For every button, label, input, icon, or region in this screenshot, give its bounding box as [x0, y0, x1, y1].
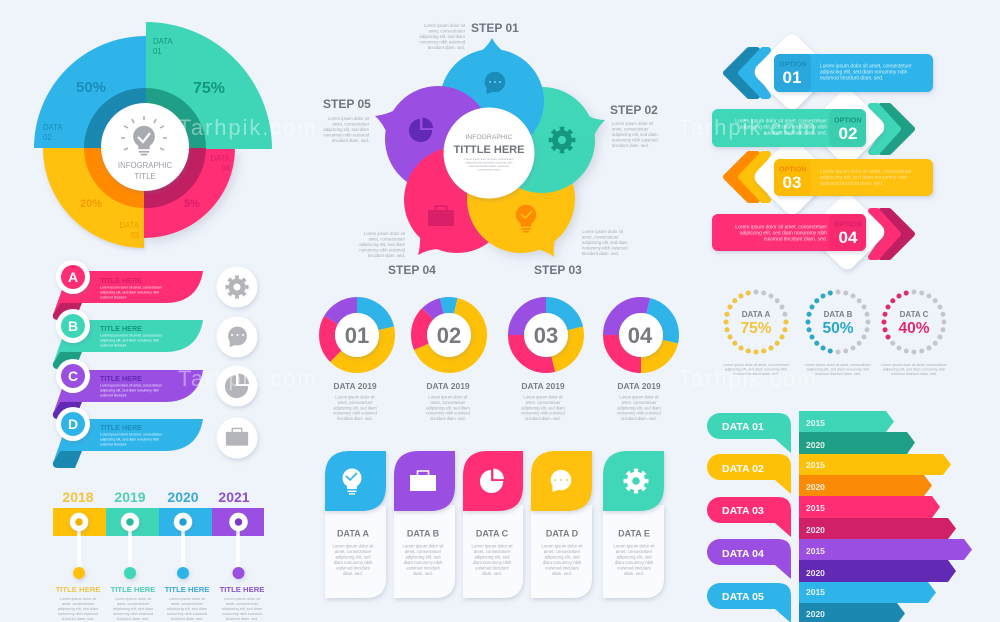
step 04 text: tincidunt diam. sed. — [368, 253, 405, 258]
ribbon B: Lorem ipsum dolor sit amet, consectetuer — [100, 334, 162, 338]
card C: diam. sed. — [482, 571, 502, 576]
bar year labels: 2015 — [806, 503, 825, 513]
value 50%: 50% — [76, 79, 106, 96]
step 01 text: nonummy nibh euismod — [419, 40, 466, 44]
step 03 text: amet, consectetuer — [582, 234, 619, 240]
card E: DATA E — [618, 528, 650, 538]
icon circle: briefcase — [216, 418, 258, 458]
timeline bar — [53, 508, 264, 536]
donut texts: tincidunt diam. sed. — [430, 416, 466, 421]
bubble: step 02 teal — [489, 87, 605, 193]
ribbon A — [53, 271, 203, 320]
center text: adipiscing elit, sed diam nonummy nibh — [466, 160, 513, 164]
step 04 text: nonummy nibh euismod — [359, 248, 406, 252]
ribbon C: euismod tincidunt — [100, 394, 126, 398]
ribbon D: euismod tincidunt — [100, 442, 126, 446]
card E: diam nonummy nibh — [615, 560, 654, 565]
icon: chat — [485, 72, 505, 94]
card E — [603, 451, 664, 598]
value 20%: 20% — [80, 198, 102, 210]
ring data C caption: adipiscing elit, sed diam nonummy nibh — [883, 368, 945, 372]
milestone texts: Lorem ipsum dolor sit — [115, 597, 151, 601]
donut texts: nonummy nibh euismod — [426, 411, 470, 416]
donut texts: tincidunt diam. sed. — [621, 416, 657, 421]
ribbon D: TITLE HERE — [100, 423, 142, 432]
icon: gear — [551, 129, 573, 151]
step 02 text: tincidunt diam. sed. — [612, 143, 649, 148]
bar year labels: 2020 — [806, 482, 825, 492]
ribbon C — [53, 370, 203, 419]
label bubble data 02 — [707, 454, 791, 494]
icon circle: pie — [216, 366, 258, 406]
milestone texts: adipiscing elit, sed diam — [167, 607, 207, 611]
card A: diam nonummy nibh — [334, 560, 373, 565]
milestone texts: amet, consectetuer — [171, 602, 204, 606]
step 05 label: STEP 05 — [323, 97, 371, 111]
step 04 text: adipiscing elit, sed diam — [359, 242, 405, 247]
badge C: C — [68, 368, 78, 384]
donut captions: DATA 2019 — [426, 381, 470, 391]
card B: amet, consectetuer — [405, 549, 442, 554]
option 4 bar: euismod tincidunt diam. sed. — [764, 236, 827, 242]
donut 04 — [611, 305, 671, 365]
card E: euismod tincidunt — [617, 566, 652, 570]
ribbon C: Lorem ipsum dolor sit amet, consectetuer — [100, 384, 162, 388]
donut texts: adipiscing elit, sed diam — [426, 405, 470, 410]
data bars panel — [707, 411, 972, 622]
donut numbers: 02 — [437, 323, 461, 348]
card B: Lorem ipsum dolor sit — [402, 544, 444, 548]
step 03 text: Lorem ipsum dolor sit — [582, 229, 624, 234]
data cards panel — [325, 451, 664, 598]
bar year labels: 2020 — [806, 609, 825, 619]
option 4 bar: adipiscing elit, sed diam nonummy nibh — [740, 230, 827, 236]
card C: DATA C — [476, 528, 509, 538]
icon: briefcase — [428, 206, 454, 226]
ring data B text: DATA B — [824, 310, 853, 319]
ring data B — [801, 285, 875, 359]
chevrons option 3 — [726, 154, 768, 200]
teal over yellow overlap — [518, 140, 595, 193]
bar year labels — [806, 418, 825, 619]
ribbon B: adipiscing elit, sed diam nonummy nibh — [100, 338, 159, 342]
step 05 text: Lorem ipsum dolor sit — [328, 116, 370, 121]
card A: euismod tincidunt — [336, 566, 371, 570]
label bubble data 04 — [707, 539, 791, 579]
ribbon D: adipiscing elit, sed diam nonummy nibh — [100, 438, 159, 442]
step 01 label: STEP 01 — [471, 21, 519, 35]
label bubble data 03 — [707, 497, 791, 537]
card D: adipiscing elit, sed — [544, 554, 580, 560]
donut numbers: 01 — [345, 323, 369, 348]
ribbon A: euismod tincidunt — [100, 296, 126, 300]
step 01 text: adipiscing elit, sed diam — [419, 34, 465, 39]
step 03 text: adipiscing elit, sed diam — [582, 240, 628, 245]
option 4 bar: OPTION — [834, 220, 862, 228]
donut texts: Lorem ipsum dolor sit — [523, 394, 563, 400]
milestone texts: tincidunt diam. sed. — [117, 617, 149, 621]
icon: light bulb — [121, 116, 167, 155]
milestone texts: adipiscing elit, sed diam — [113, 607, 153, 611]
ring data A text — [740, 310, 772, 337]
pie segment: data 04 pink — [144, 148, 235, 238]
option 4 bar: 04 — [839, 228, 858, 247]
card B: DATA B — [407, 528, 440, 538]
milestone texts: tincidunt diam. sed. — [226, 617, 258, 621]
ring data C text: DATA C — [900, 310, 929, 319]
pie chart panel — [34, 22, 272, 248]
card C: diam nonummy nibh — [473, 560, 512, 565]
milestone texts: Lorem ipsum dolor sit — [169, 597, 205, 601]
center text: consectetuer lorem — [478, 168, 501, 172]
card A — [325, 451, 386, 598]
donut texts: tincidunt diam. sed. — [525, 416, 561, 421]
ribbon A: Lorem ipsum dolor sit amet, consectetuer — [100, 286, 162, 290]
step 05 text: amet, consectetuer — [332, 122, 370, 126]
watermark: Tarhpik.com — [178, 366, 318, 391]
donut centers — [335, 313, 663, 357]
step 03 text: nonummy nibh euismod — [582, 246, 628, 250]
donut captions — [333, 381, 661, 391]
white diamonds — [751, 31, 888, 273]
milestone rings — [72, 516, 245, 528]
donut texts: amet, consectetuer — [431, 400, 466, 405]
step 01 text: Lorem ipsum dolor sit — [424, 23, 466, 28]
card E: diam. sed. — [624, 571, 644, 576]
ring data A caption: Lorem ipsum dolor sit amet, consectetuer — [723, 363, 789, 367]
option 3 bar: OPTION — [779, 164, 807, 174]
step 04 text: Lorem ipsum dolor sit — [364, 231, 406, 236]
option 2 bar: Lorem ipsum dolor sit amet, consectetuer — [735, 118, 827, 124]
donut 01 — [327, 305, 387, 365]
option 1 bar: Lorem ipsum dolor sit amet, consectetuer — [820, 64, 912, 70]
step 02 label: STEP 02 — [610, 103, 658, 117]
card D: DATA D — [546, 528, 579, 538]
step diagram panel — [323, 21, 658, 277]
card D: diam nonummy nibh — [543, 560, 582, 565]
milestone texts: nonummy nibh euismod — [58, 612, 98, 616]
center text: Lorem ipsum dolor sit amet, consectetuer — [464, 158, 514, 161]
ring data B text: 50% — [822, 320, 854, 337]
center text: INFOGRAPHIC — [465, 134, 513, 141]
timeline years: 2018 — [62, 489, 94, 505]
ribbon A: adipiscing elit, sed diam nonummy nibh — [100, 290, 159, 294]
step 03 label: STEP 03 — [534, 263, 582, 277]
ring data C caption: euismod tincidunt diam. sed. — [891, 372, 937, 376]
milestone texts: amet, consectetuer — [117, 602, 150, 606]
label data 02: DATA — [43, 123, 63, 132]
milestone titles: TITLE HERE — [56, 585, 100, 594]
ribbon B: TITLE HERE — [100, 324, 142, 333]
card C: amet, consectetuer — [474, 549, 511, 554]
pie title: TITLE — [134, 172, 156, 181]
donut texts: nonummy nibh euismod — [617, 411, 661, 416]
donut texts: adipiscing elit, sed diam — [333, 405, 377, 410]
pie segment: data 03 yellow — [43, 148, 144, 248]
label data 01: 01 — [153, 47, 162, 56]
icon circle: chat — [216, 316, 258, 358]
milestone texts: nonummy nibh euismod — [113, 612, 153, 616]
label bubble data 01 — [707, 413, 791, 453]
bar year labels: 2015 — [806, 587, 825, 597]
bar year labels: 2015 — [806, 460, 825, 470]
bubble: step 04 pink — [404, 147, 510, 255]
donut numbers: 04 — [628, 323, 653, 348]
ribbon B — [53, 320, 203, 369]
donut texts: Lorem ipsum dolor sit — [335, 394, 375, 400]
icon: bulb — [516, 205, 536, 232]
option 3 bar: Lorem ipsum dolor sit amet, consectetuer — [820, 169, 912, 175]
options panel — [712, 31, 933, 273]
option 1 bar: adipiscing elit, sed diam nonummy nibh — [820, 70, 907, 76]
milestone dots — [73, 567, 244, 579]
donut texts: nonummy nibh euismod — [521, 411, 565, 416]
card B: diam nonummy nibh — [404, 560, 443, 565]
step 01 text: amet, consectetuer — [428, 28, 466, 34]
card C — [463, 451, 523, 598]
step 05 text: nonummy nibh euismod — [323, 132, 370, 138]
ring data B caption: euismod tincidunt diam. sed. — [815, 372, 861, 376]
label bubble data 03: DATA 03 — [722, 505, 764, 517]
option 2 bar: 02 — [839, 124, 857, 143]
step 02 text: Lorem ipsum dolor sit — [612, 121, 654, 126]
label data 03: 03 — [130, 231, 139, 240]
ribbon A: TITLE HERE — [100, 276, 142, 285]
step 04 text: amet, consectetuer — [368, 236, 406, 242]
card E: adipiscing elit, sed — [616, 554, 652, 560]
option 2 bar — [712, 109, 866, 147]
option 1 bar: euismod tincidunt diam. sed. — [820, 76, 883, 82]
card A: DATA A — [337, 528, 369, 538]
bar year labels: 2020 — [806, 440, 825, 450]
option 1 bar: OPTION — [779, 60, 807, 68]
milestone texts: amet, consectetuer — [62, 602, 95, 606]
timeline years — [62, 489, 250, 505]
label bubble data 02: DATA 02 — [722, 463, 764, 475]
bar year labels: 2015 — [806, 546, 825, 556]
bubble: step 03 yellow — [467, 145, 575, 257]
value 5%: 5% — [184, 198, 200, 210]
ring data B caption: adipiscing elit, sed diam nonummy nibh — [807, 368, 869, 372]
option 3 bar — [774, 159, 933, 196]
icon: pie — [409, 117, 433, 142]
milestone texts: tincidunt diam. sed. — [171, 617, 203, 621]
option 2 bar: euismod tincidunt diam. sed. — [764, 130, 827, 136]
chevrons option 1 — [726, 50, 768, 96]
donut numbers: 03 — [534, 323, 558, 348]
label bubble data 01: DATA 01 — [722, 421, 764, 433]
card E: Lorem ipsum dolor sit — [613, 544, 655, 548]
step 02 text: nonummy nibh euismod — [612, 138, 658, 142]
ring data A caption: adipiscing elit, sed diam nonummy nibh — [725, 368, 787, 372]
ring data A caption: euismod tincidunt diam. sed. — [733, 372, 779, 376]
milestone titles: TITLE HERE — [165, 585, 209, 594]
bar year labels: 2015 — [806, 418, 825, 428]
milestone texts: adipiscing elit, sed diam — [58, 607, 98, 611]
option 4 bar: Lorem ipsum dolor sit amet, consectetuer — [735, 224, 827, 230]
card B: diam. sed. — [413, 571, 433, 576]
milestone titles: TITLE HERE — [111, 585, 155, 594]
option 2 bar: adipiscing elit, sed diam nonummy nibh — [740, 124, 827, 130]
center circle — [101, 103, 189, 191]
ring data A text: 75% — [740, 320, 772, 337]
step 02 text: amet, consectetuer — [612, 126, 649, 132]
badge C — [56, 359, 90, 393]
pie segment: data 02 blue — [34, 36, 146, 148]
milestone texts: amet, consectetuer — [226, 602, 259, 606]
pie segment: data 01 teal — [146, 22, 272, 149]
bubble: step 05 purple — [375, 86, 491, 192]
ring data C text: 40% — [898, 320, 930, 337]
watermark: Tarhpik.com — [678, 115, 818, 140]
value 75%: 75% — [193, 80, 225, 97]
ribbon D: Lorem ipsum dolor sit amet, consectetuer — [100, 432, 162, 436]
badge D: D — [68, 416, 78, 432]
icon circle: gear — [216, 266, 258, 308]
step 03 text: tincidunt diam. sed. — [582, 251, 619, 256]
ribbon B: euismod tincidunt — [100, 344, 126, 348]
card A: adipiscing elit, sed — [335, 554, 371, 560]
donut captions: DATA 2019 — [521, 381, 565, 391]
horizontal bars — [799, 411, 972, 622]
step 01 text: tincidunt diam. sed. — [428, 45, 465, 50]
badge A — [56, 260, 90, 294]
pie title: INFOGRAPHIC — [118, 161, 172, 170]
center text — [454, 134, 524, 172]
card C: Lorem ipsum dolor sit — [471, 544, 513, 548]
option 4 bar — [712, 214, 866, 251]
donut numbers — [345, 323, 653, 348]
center text: euismod tincidunt diam. sed amet, — [469, 164, 510, 168]
step 05 text: tincidunt diam. sed. — [332, 138, 369, 143]
donut texts: amet, consectetuer — [338, 400, 373, 405]
card D — [531, 451, 592, 598]
ribbon D — [53, 419, 203, 468]
donut charts panel — [327, 305, 671, 421]
label data 03: DATA — [119, 221, 139, 230]
donut texts: nonummy nibh euismod — [333, 411, 377, 416]
label data 04: 04 — [221, 164, 231, 173]
timeline years: 2021 — [218, 489, 250, 505]
option 3 bar: adipiscing elit, sed diam nonummy nibh — [820, 175, 907, 181]
card E: amet, consectetuer — [616, 549, 653, 554]
milestone texts: nonummy nibh euismod — [167, 612, 207, 616]
step 02 text: adipiscing elit, sed diam — [612, 132, 658, 137]
donut texts: Lorem ipsum dolor sit — [619, 394, 659, 400]
donut texts: adipiscing elit, sed diam — [521, 405, 565, 410]
donut captions: DATA 2019 — [333, 381, 377, 391]
card B: euismod tincidunt — [406, 566, 441, 570]
badge A: A — [68, 269, 78, 285]
donut texts: amet, consectetuer — [622, 400, 657, 405]
ring data A — [726, 292, 786, 352]
ribbon C: adipiscing elit, sed diam nonummy nibh — [100, 388, 159, 392]
bar year labels: 2020 — [806, 568, 825, 578]
inner ring — [84, 88, 206, 208]
milestone texts: Lorem ipsum dolor sit — [60, 597, 96, 601]
milestone texts: adipiscing elit, sed diam — [222, 607, 262, 611]
card D: Lorem ipsum dolor sit — [541, 544, 583, 548]
card A: amet, consectetuer — [335, 549, 372, 554]
card C: adipiscing elit, sed — [474, 554, 510, 560]
center circle — [444, 108, 534, 198]
label bubble data 05: DATA 05 — [722, 591, 764, 603]
label data 02: 02 — [43, 133, 52, 142]
label bubble data 04: DATA 04 — [722, 548, 764, 560]
ring data A text: DATA A — [742, 310, 770, 319]
milestone texts: nonummy nibh euismod — [222, 612, 262, 616]
donut texts — [333, 394, 661, 421]
timeline years: 2020 — [167, 489, 199, 505]
ring data B caption: Lorem ipsum dolor sit amet, consectetuer — [805, 363, 871, 367]
milestone texts: tincidunt diam. sed. — [62, 617, 94, 621]
badge B — [56, 309, 90, 343]
ribbon list panel — [53, 260, 257, 468]
card D: amet, consectetuer — [544, 549, 581, 554]
card B: adipiscing elit, sed — [405, 554, 441, 560]
bar year labels: 2020 — [806, 525, 825, 535]
card D: euismod tincidunt — [545, 566, 580, 570]
label data 04: DATA — [210, 154, 230, 163]
badge D — [56, 407, 90, 441]
connector lines — [79, 530, 238, 568]
donut texts: Lorem ipsum dolor sit — [428, 394, 468, 400]
watermark: Tarhpik.com — [178, 115, 318, 140]
option 3 bar: 03 — [783, 173, 801, 192]
card A: diam. sed. — [343, 571, 363, 576]
milestone titles: TITLE HERE — [220, 585, 264, 594]
label bubble data 05 — [707, 583, 791, 622]
ring data B text — [822, 310, 854, 337]
option 1 bar: 01 — [783, 68, 801, 87]
card B — [394, 451, 455, 598]
donut 03 — [516, 305, 576, 365]
option 2 bar: OPTION — [834, 116, 862, 124]
dotted progress rings panel — [723, 281, 955, 376]
center text: TITTLE HERE — [454, 144, 524, 156]
milestone texts: Lorem ipsum dolor sit — [224, 597, 260, 601]
milestone texts — [58, 597, 262, 621]
card D: diam. sed. — [552, 571, 572, 576]
step 04 label: STEP 04 — [388, 263, 436, 277]
timeline years: 2019 — [114, 489, 146, 505]
bubble: step 01 blue — [440, 38, 544, 153]
donut captions: DATA 2019 — [617, 381, 661, 391]
option 1 bar — [774, 54, 933, 92]
donut texts: tincidunt diam. sed. — [337, 416, 373, 421]
watermark: Tarhpik.com — [678, 366, 818, 391]
badge B: B — [68, 318, 78, 334]
ring data C — [873, 281, 955, 363]
ring data C caption: Lorem ipsum dolor sit amet, consectetuer — [881, 363, 947, 367]
donut texts: adipiscing elit, sed diam — [617, 405, 661, 410]
chevrons option 2 — [871, 106, 912, 152]
ribbon C: TITLE HERE — [100, 374, 142, 383]
ring data C text — [898, 310, 930, 337]
donut texts: amet, consectetuer — [526, 400, 561, 405]
milestone titles — [56, 585, 264, 594]
label data 01: DATA — [153, 37, 173, 46]
card A: Lorem ipsum dolor sit — [332, 544, 374, 548]
timeline panel — [53, 489, 264, 621]
donut 02 — [419, 305, 479, 365]
watermark — [178, 115, 818, 391]
chevrons option 4 — [871, 211, 912, 257]
option 3 bar: euismod tincidunt diam. sed. — [820, 181, 883, 187]
step 05 text: adipiscing elit, sed diam — [323, 127, 369, 132]
card C: euismod tincidunt — [475, 566, 510, 570]
